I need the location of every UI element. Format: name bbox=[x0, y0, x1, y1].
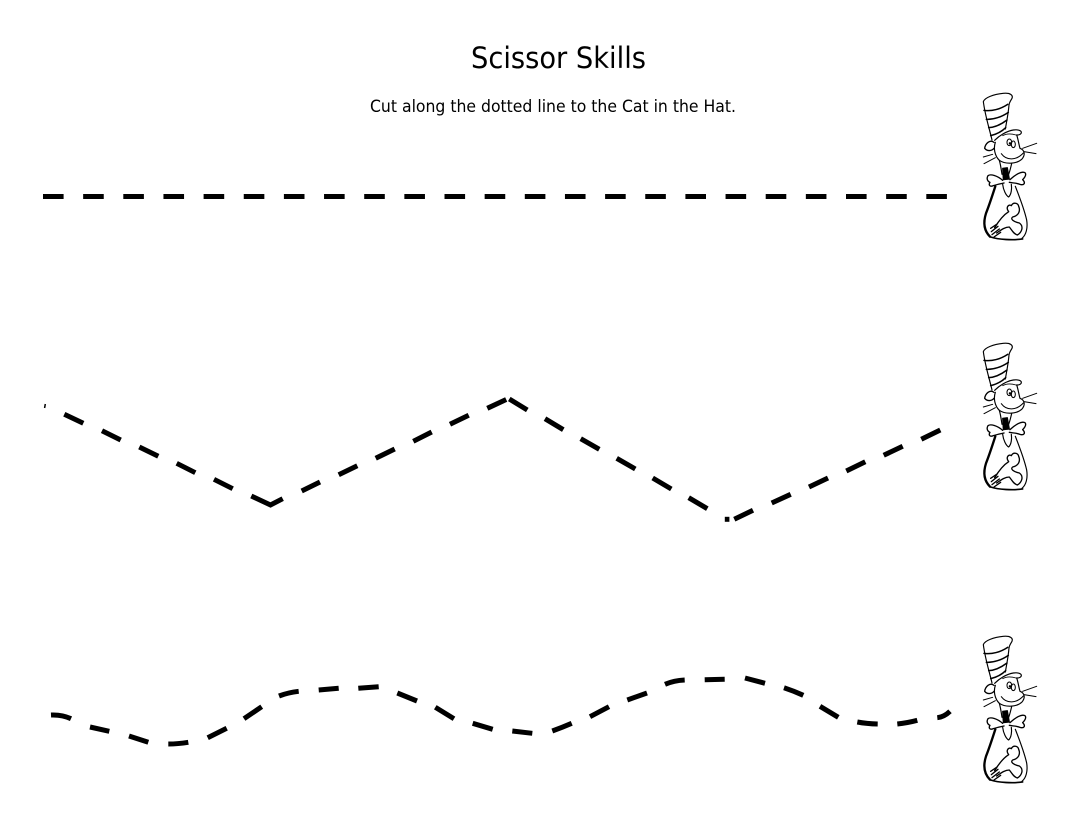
icon: cat in the hat, bottom bbox=[983, 636, 1037, 783]
title: Scissor Skills bbox=[471, 41, 646, 75]
zigzag dashed cutting line bbox=[45, 399, 940, 519]
icon: cat in the hat, middle bbox=[983, 343, 1037, 490]
straight dashed cutting line bbox=[43, 194, 947, 199]
icon: cat in the hat, top bbox=[983, 93, 1037, 240]
instruction text: Cut along the dotted line to the Cat in the Hat. bbox=[370, 97, 736, 117]
wavy dashed cutting line bbox=[51, 678, 950, 744]
